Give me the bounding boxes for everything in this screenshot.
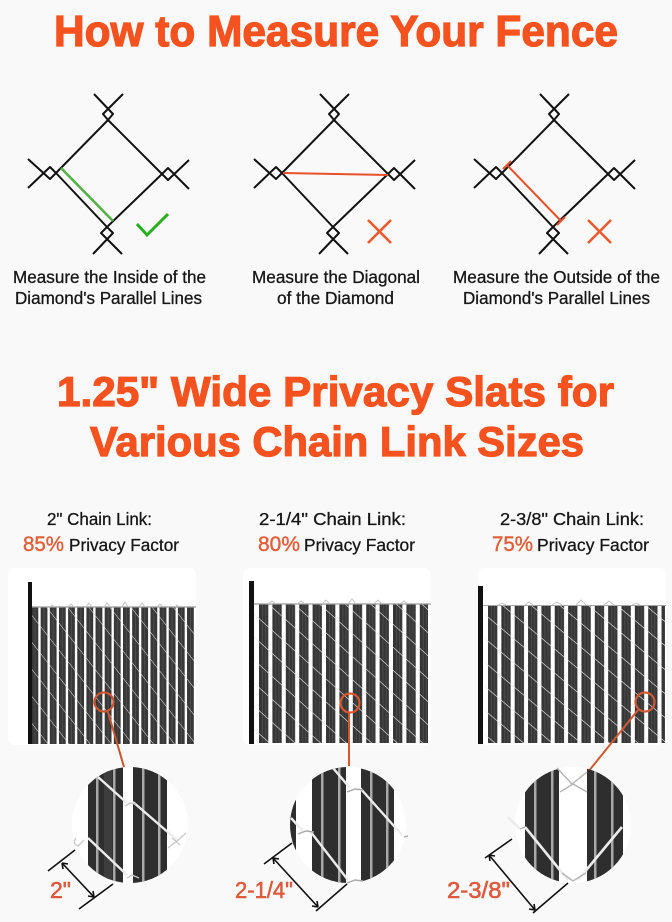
callout ring and leader bbox=[94, 692, 124, 767]
caption: diagonal: of the Diamond bbox=[277, 288, 394, 308]
red diagonal line bbox=[283, 173, 388, 175]
label: 2 inch privacy: 2" Chain Link: bbox=[47, 509, 152, 529]
heading: privacy slats: 1.25" Wide Privacy Slats for bbox=[57, 368, 614, 415]
fence photo: 2-3/8 inch bbox=[478, 568, 666, 745]
zoom circle: 2-1/4 inch bbox=[290, 767, 408, 884]
green measure line bbox=[61, 168, 113, 221]
caption: inside: Measure the Inside of the bbox=[13, 267, 206, 287]
diagram: measure diagonal bbox=[252, 94, 420, 308]
label: 2-3/8 inch privacy bbox=[492, 509, 649, 556]
label: 2-1/4 inch privacy bbox=[258, 509, 415, 556]
label: 2-3/8 inch privacy: 2-3/8" Chain Link: bbox=[500, 509, 644, 529]
zoom circle: 2 inch bbox=[74, 767, 186, 883]
label: 2-1/4 inch privacy: 80% bbox=[258, 533, 300, 556]
chain link diamond bbox=[474, 94, 635, 254]
dimension: 2-1/4 inch bbox=[235, 843, 347, 911]
label: 2 inch privacy: Privacy Factor bbox=[69, 535, 179, 555]
label: 2-1/4 inch privacy: Privacy Factor bbox=[304, 535, 415, 555]
fence photo: 2-1/4 inch bbox=[243, 568, 431, 745]
diagram: measure outside bbox=[453, 94, 660, 308]
caption: diagonal: Measure the Diagonal bbox=[252, 267, 420, 287]
dimension: 2-3/8 inch bbox=[447, 839, 568, 913]
icon: check mark bbox=[137, 214, 168, 235]
heading: privacy slats: Various Chain Link Sizes bbox=[90, 418, 584, 465]
chain link diamond bbox=[28, 94, 189, 254]
dimension: 2-1/4 inch: 2-1/4" bbox=[235, 877, 293, 903]
caption: outside: Diamond's Parallel Lines bbox=[463, 288, 650, 308]
callout ring and leader bbox=[588, 692, 654, 772]
zoom circle: 2-3/8 inch bbox=[508, 768, 623, 882]
column: 2-3/8 inch chain link bbox=[447, 509, 666, 913]
label: 2 inch privacy: 85% bbox=[23, 533, 64, 556]
label: 2 inch privacy bbox=[23, 509, 179, 556]
title: How to Measure Your Fence bbox=[54, 7, 618, 56]
caption: inside: Diamond's Parallel Lines bbox=[15, 288, 202, 308]
fence photo: 2 inch bbox=[8, 568, 196, 745]
column: 2-1/4 inch chain link bbox=[235, 509, 431, 911]
caption: outside: Measure the Outside of the bbox=[453, 267, 660, 287]
red outside line bbox=[503, 161, 565, 225]
icon: red x bbox=[368, 220, 391, 243]
column: 2 inch chain link bbox=[8, 509, 196, 909]
dimension: 2 inch: 2" bbox=[50, 877, 71, 903]
callout ring and leader bbox=[340, 694, 360, 766]
dimension: 2 inch bbox=[48, 850, 113, 909]
dimension: 2-3/8 inch: 2-3/8" bbox=[447, 877, 510, 903]
label: 2-3/8 inch privacy: Privacy Factor bbox=[537, 535, 649, 555]
icon: red x bbox=[588, 220, 611, 243]
diagram: measure inside bbox=[13, 94, 206, 308]
label: 2-3/8 inch privacy: 75% bbox=[492, 533, 533, 556]
chain link diamond bbox=[254, 94, 415, 254]
label: 2-1/4 inch privacy: 2-1/4" Chain Link: bbox=[259, 509, 406, 529]
